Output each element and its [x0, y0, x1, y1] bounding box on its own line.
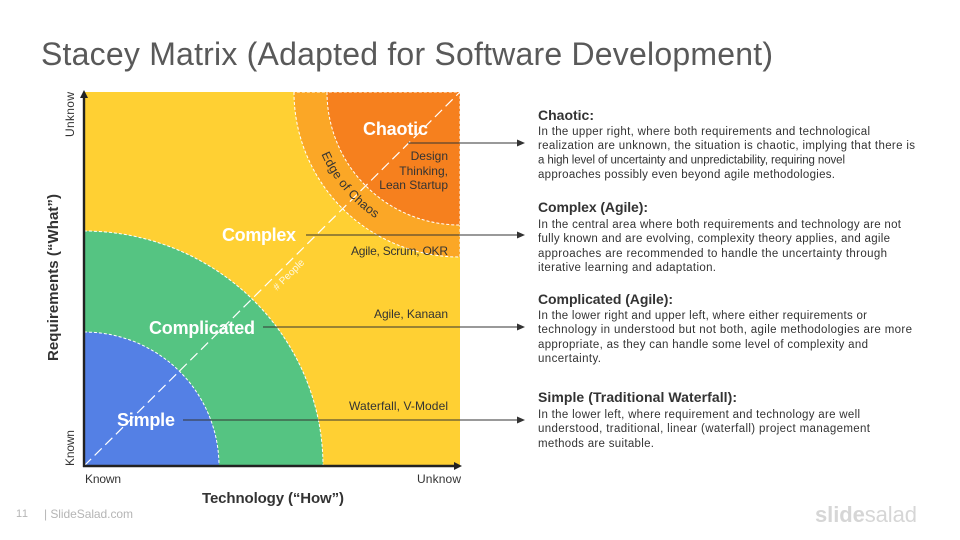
- text block: complicated: technology in understood but not both, agile methodologies are more: [538, 324, 912, 336]
- text block: chaotic: In the upper right, where both requirements and technological: [538, 126, 870, 138]
- axis tick labels: Known: [85, 472, 121, 486]
- text block: complicated: appropriate, as they can handle some level of complexity and: [538, 339, 868, 351]
- text block: complex: [538, 199, 902, 274]
- methods labels: Lean Startup: [379, 178, 448, 192]
- arrow: chaotic: [408, 140, 525, 146]
- text block: complicated: uncertainty.: [538, 353, 601, 365]
- zone: chaotic: [327, 92, 460, 225]
- axis tick labels: Known: [63, 430, 77, 466]
- zone: complicated: [84, 231, 323, 466]
- y axis title: Requirements (“What”): [45, 194, 62, 361]
- zone: complex background: [84, 92, 460, 466]
- axis tick labels: Unknow: [417, 472, 461, 486]
- title: Stacey Matrix (Adapted for Software Development): [41, 36, 773, 72]
- methods labels: Agile, Kanaan: [374, 307, 448, 321]
- zone: simple: [84, 332, 219, 466]
- zone: edge of chaos: [294, 92, 460, 257]
- text block: complex: fully known and are evolving, complexity theory applies, and agile: [538, 233, 890, 245]
- text block: complex: approaches are recommended to handle the uncertainty through: [538, 248, 887, 260]
- page number: 11: [16, 508, 28, 520]
- zone labels: [117, 119, 428, 430]
- axis tick labels: [63, 92, 461, 486]
- text block: simple: understood, traditional, linear (waterfall) project management: [538, 423, 871, 435]
- text block: chaotic: realization are unknown, the situation is chaotic, implying that there is: [538, 140, 915, 152]
- text block: complicated: In the lower right and upper left, where either requirements or: [538, 310, 867, 322]
- methods labels: Waterfall, V-Model: [349, 399, 448, 413]
- text block: complicated: Complicated (Agile):: [538, 291, 673, 307]
- label: # People: # People: [271, 257, 307, 293]
- axes: [80, 90, 462, 470]
- x axis title: Technology (“How”): [202, 490, 344, 507]
- footer text: | SlideSalad.com: [44, 507, 133, 521]
- axis tick labels: Unknow: [63, 92, 77, 137]
- arrow: complicated: [263, 324, 525, 330]
- zone labels: Complicated: [149, 318, 255, 338]
- chart: Stacey matrix: [45, 90, 462, 507]
- text block: complex: iterative learning and adaptation.: [538, 262, 716, 274]
- methods labels: Thinking,: [399, 164, 448, 178]
- text block: chaotic: approaches possibly even beyond agile methodologies.: [538, 169, 835, 181]
- text block: simple: methods are suitable.: [538, 438, 654, 450]
- zone labels: Chaotic: [363, 119, 428, 139]
- text block: chaotic: a high level of uncertainty and unpredictability, requiring novel: [538, 154, 845, 166]
- zone labels: Complex: [222, 225, 296, 245]
- arrow: simple: [183, 416, 525, 424]
- text block: simple: [538, 389, 871, 450]
- zone labels: Simple: [117, 410, 175, 430]
- label: Edge of Chaos: Edge of Chaos: [322, 151, 378, 218]
- text block: chaotic: [538, 107, 915, 181]
- text block: chaotic: Chaotic:: [538, 107, 594, 123]
- text block: complex: Complex (Agile):: [538, 199, 648, 215]
- arrow: complex: [306, 232, 525, 238]
- text block: complicated: [538, 291, 912, 365]
- logo: slidesalad: [815, 502, 917, 527]
- methods labels: Agile, Scrum, OKR: [351, 244, 448, 258]
- methods labels: Design: [411, 149, 448, 163]
- methods labels: [349, 149, 448, 413]
- text block: simple: Simple (Traditional Waterfall):: [538, 389, 737, 405]
- text block: simple: In the lower left, where requirement and technology are well: [538, 409, 860, 421]
- text block: complex: In the central area where both requirements and technology are not: [538, 219, 902, 231]
- diagonal: number of people: [84, 92, 460, 466]
